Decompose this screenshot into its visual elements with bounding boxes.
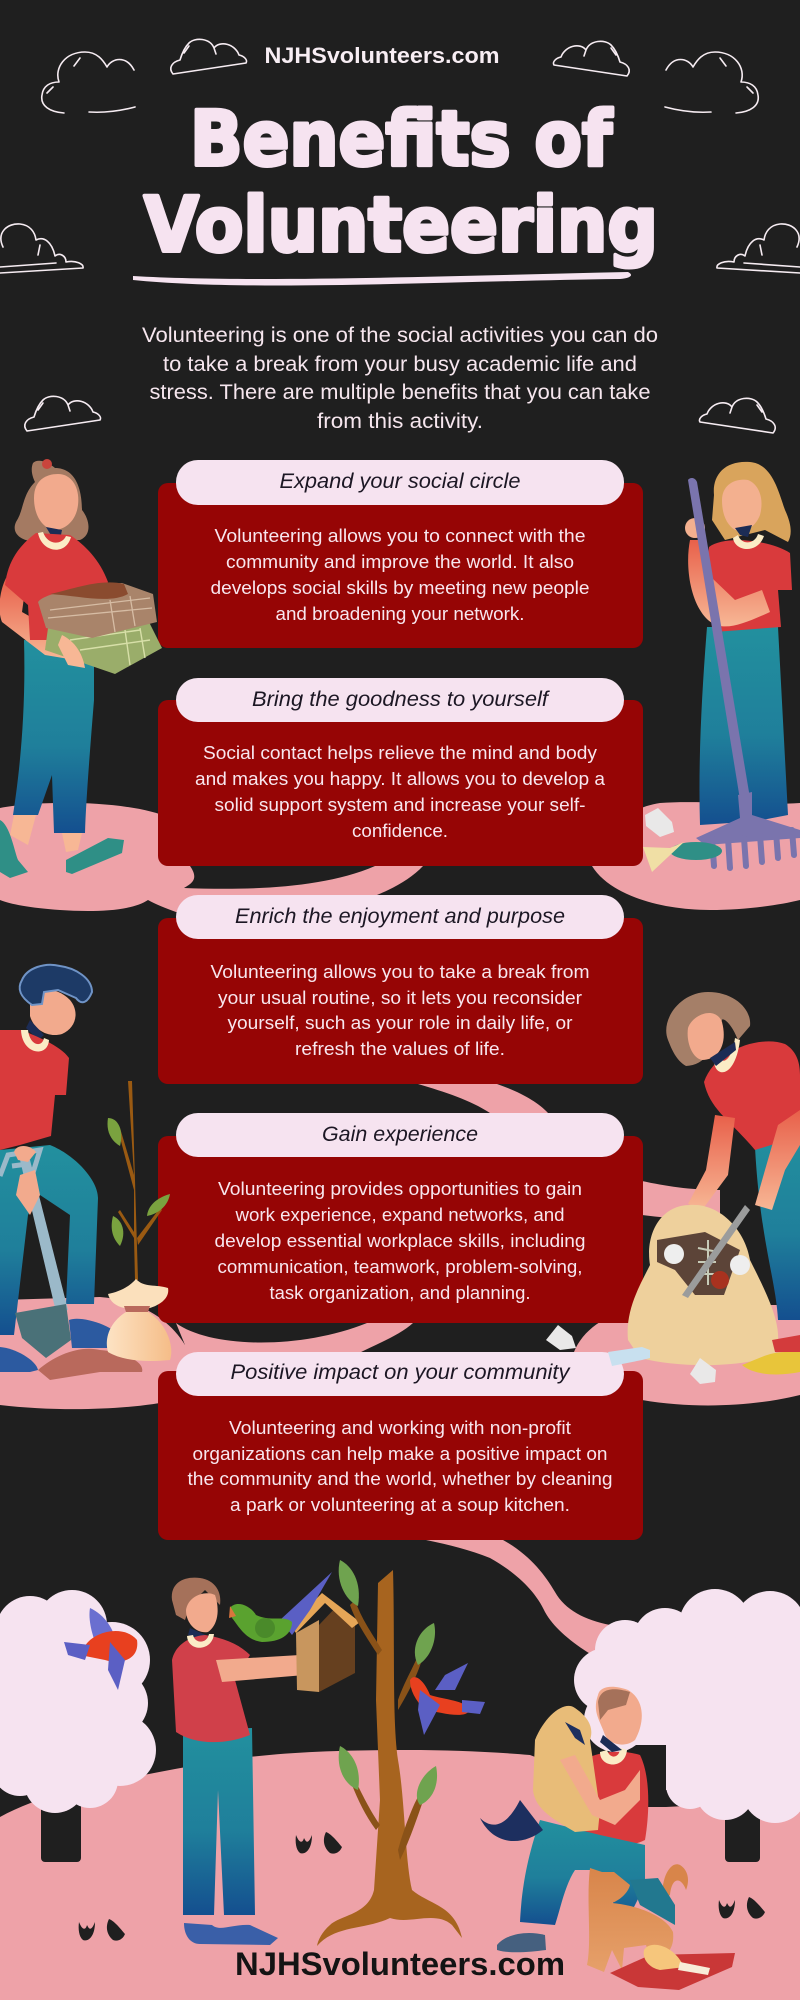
panel: expand your social circle: Volunteering allows you to connect with the bbox=[214, 526, 586, 546]
panel: bring the goodness to yourself bbox=[158, 678, 643, 866]
icon: central tree bbox=[317, 1560, 462, 1946]
panel: enrich the enjoyment and purpose: your usual routine, so it lets you reconsider bbox=[218, 988, 582, 1008]
pink ground and winding path bbox=[0, 802, 800, 2000]
title bbox=[144, 94, 658, 269]
panel: positive impact on your community: Volunteering and working with non-profit bbox=[229, 1418, 571, 1438]
panel: positive impact on your community bbox=[158, 1352, 643, 1540]
intro text bbox=[142, 324, 658, 433]
tree: left pale tree bbox=[0, 1590, 156, 1862]
panel: expand your social circle: develops social skills by meeting new people bbox=[210, 578, 590, 598]
intro text: from this activity. bbox=[317, 410, 483, 433]
panel: positive impact on your community: the community and the world, whether by cleaning bbox=[188, 1469, 612, 1489]
icon: red parrot on tree bbox=[410, 1663, 485, 1735]
panel: gain experience: task organization, and planning. bbox=[270, 1283, 530, 1303]
panel: gain experience bbox=[158, 1113, 643, 1323]
intro text: Volunteering is one of the social activities you can do bbox=[142, 324, 658, 347]
panel: bring the goodness to yourself: and makes you happy. It allows you to develop a bbox=[195, 769, 606, 789]
panel: enrich the enjoyment and purpose bbox=[158, 895, 643, 1084]
panel: expand your social circle bbox=[158, 460, 643, 648]
person: woman collecting trash into sack bbox=[546, 992, 800, 1384]
panel: gain experience: develop essential workplace skills, including bbox=[214, 1231, 586, 1251]
clouds: line art bbox=[0, 39, 800, 433]
bottom site name: NJHSvolunteers.com bbox=[235, 1946, 565, 1982]
panel: enrich the enjoyment and purpose: Enrich the enjoyment and purpose bbox=[235, 905, 565, 928]
panel: enrich the enjoyment and purpose: refresh the values of life. bbox=[295, 1039, 505, 1059]
title: Benefits of bbox=[190, 94, 613, 183]
panel: gain experience: work experience, expand networks, and bbox=[234, 1205, 564, 1225]
person: man holding birdhouse bbox=[172, 1578, 312, 1945]
panel: enrich the enjoyment and purpose: yourself, such as your role in daily life, or bbox=[228, 1013, 572, 1033]
person: man digging with shovel bbox=[0, 965, 142, 1380]
icon: birdhouse bbox=[290, 1593, 360, 1692]
panel: bring the goodness to yourself: Bring the goodness to yourself bbox=[252, 688, 550, 711]
panel: bring the goodness to yourself: confidence. bbox=[352, 821, 448, 841]
person: man hugging dog bbox=[480, 1687, 648, 1952]
icon: orange cat bbox=[587, 1864, 688, 1972]
title: Volunteering bbox=[144, 180, 658, 269]
panel: enrich the enjoyment and purpose: Volunteering allows you to take a break from bbox=[210, 962, 590, 982]
panel: positive impact on your community: Positive impact on your community bbox=[230, 1361, 571, 1384]
panel: gain experience: Volunteering provides opportunities to gain bbox=[218, 1179, 582, 1199]
icon: bird in left tree bbox=[64, 1608, 137, 1690]
title underline bbox=[133, 272, 631, 286]
icon: green parrot bbox=[229, 1572, 332, 1642]
icon: sapling with sack bbox=[107, 1081, 171, 1361]
panel: positive impact on your community: a park or volunteering at a soup kitchen. bbox=[230, 1495, 570, 1515]
person: woman with rake bbox=[643, 462, 800, 872]
panel: expand your social circle: Expand your social circle bbox=[280, 470, 520, 493]
intro text: to take a break from your busy academic life and bbox=[163, 353, 637, 376]
panel: positive impact on your community: organizations can help make a positive impact on bbox=[192, 1444, 608, 1464]
icon: red blanket with bone bbox=[610, 1945, 735, 1990]
panel: expand your social circle: community and improve the world. It also bbox=[226, 552, 574, 572]
tree: right pale tree bbox=[574, 1589, 800, 1862]
icon: grass tufts bbox=[79, 1832, 765, 1941]
panel: gain experience: Gain experience bbox=[322, 1123, 478, 1146]
top site name: NJHSvolunteers.com bbox=[264, 43, 500, 68]
panel: gain experience: communication, teamwork, problem-solving, bbox=[218, 1257, 582, 1277]
panel: expand your social circle: and broadening your network. bbox=[276, 604, 524, 624]
person: woman carrying folded clothes bbox=[0, 459, 162, 878]
intro text: stress. There are multiple benefits that you can take bbox=[150, 381, 650, 404]
panel: bring the goodness to yourself: solid support system and increase your self- bbox=[214, 795, 586, 815]
panel: bring the goodness to yourself: Social contact helps relieve the mind and body bbox=[203, 743, 597, 763]
